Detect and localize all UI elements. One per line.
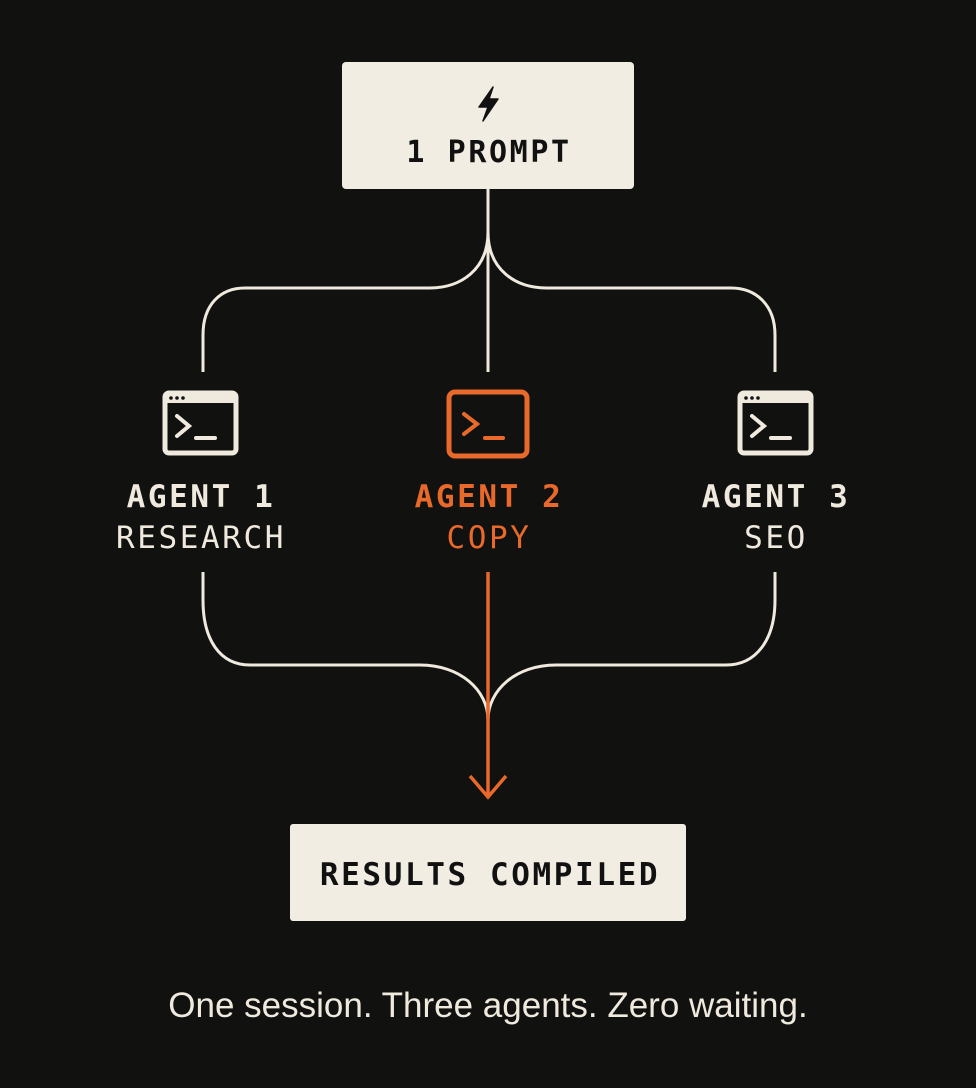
agent 2 xyxy=(415,392,563,556)
agent 1 xyxy=(116,393,286,556)
caption: One session. Three agents. Zero waiting. xyxy=(168,986,808,1025)
agent 3: SEO xyxy=(744,520,808,556)
icon: terminal 1 xyxy=(165,393,236,453)
bottom connector lines xyxy=(203,572,775,720)
agent 3 xyxy=(702,393,850,556)
agent 1: RESEARCH xyxy=(116,520,286,556)
results box xyxy=(290,824,686,921)
arrow: orange xyxy=(470,572,506,797)
top connector lines xyxy=(203,189,775,372)
icon: terminal 2 xyxy=(449,392,527,456)
prompt box: 1 PROMPT xyxy=(406,135,572,170)
prompt box xyxy=(342,62,634,189)
results box: RESULTS COMPILED xyxy=(320,857,660,893)
icon: lightning xyxy=(479,87,498,121)
agent 2: AGENT 2 xyxy=(415,479,563,515)
agent 2: COPY xyxy=(446,520,532,556)
agent 3: AGENT 3 xyxy=(702,479,850,515)
agent 1: AGENT 1 xyxy=(127,479,275,515)
icon: terminal 3 xyxy=(740,393,811,453)
